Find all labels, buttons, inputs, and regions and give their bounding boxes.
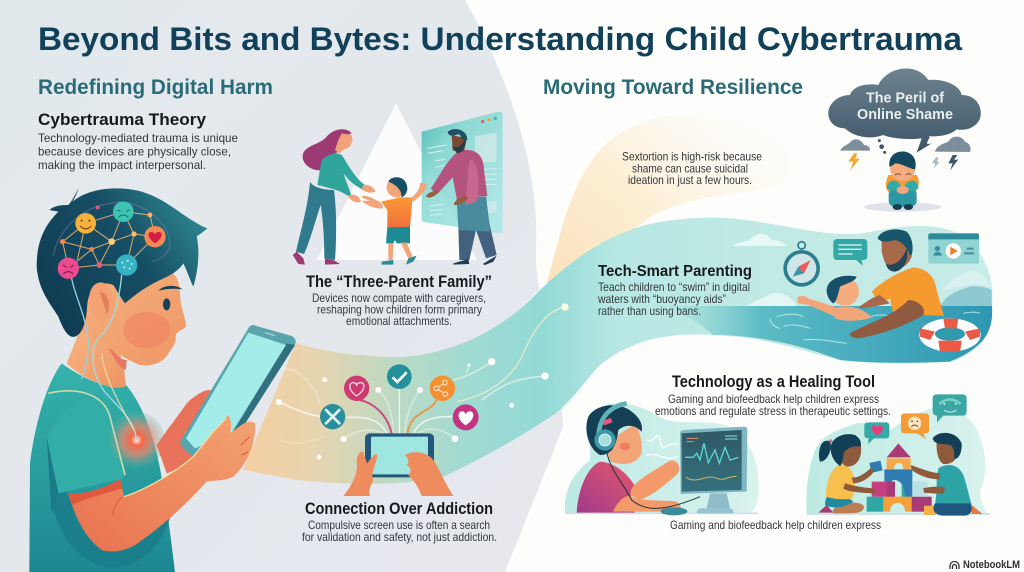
emotion faces (75, 213, 96, 234)
text block: Cybertrauma Theory (38, 110, 238, 172)
panel: peril of online shame (828, 68, 981, 212)
text block: Tech-Smart Parenting (597, 263, 752, 318)
panel: left gray region (0, 0, 563, 572)
threads (48, 275, 137, 475)
icon: heart outline (344, 376, 369, 401)
icon: video card (928, 233, 979, 264)
text block: sextortion: ideation in just a few hours. (628, 173, 752, 187)
blocks (867, 497, 883, 512)
text block: The Three-Parent Family: Devices now compate with caregivers, (312, 291, 486, 305)
text block: The Three-Parent Family: reshaping how children form primary (317, 302, 482, 316)
text block: Technology as a Healing Tool (655, 373, 891, 418)
white swoosh (487, 285, 548, 335)
phone (180, 325, 296, 456)
hands (343, 451, 377, 496)
life ring (919, 318, 981, 352)
icon: tools (320, 404, 345, 429)
caption: Gaming and biofeedback help children express (670, 518, 881, 532)
illustration: children with building blocks (806, 394, 990, 516)
heading: Redefining Digital Harm: Redefining Digital Harm (38, 76, 273, 99)
network (53, 202, 170, 268)
icon: chat bubble (833, 239, 867, 266)
arm (68, 415, 255, 552)
child (577, 462, 637, 513)
text block: Tech-Smart Parenting: Tech-Smart Parenting (598, 263, 752, 280)
text block: Technology as a Healing Tool: Technology as a Healing Tool (672, 373, 875, 391)
teal flow band (243, 218, 993, 484)
text block: Connection Over Addiction: Compulsive screen use is often a search (308, 518, 490, 532)
illustration: connection network and tablet (276, 303, 569, 496)
text block: Tech-Smart Parenting: waters with “buoyancy aids” (597, 292, 726, 306)
text block: The Three-Parent Family (306, 273, 492, 328)
icon: compass (783, 242, 820, 287)
girl (818, 505, 833, 513)
text block: Connection Over Addiction (302, 499, 497, 544)
device screen (422, 112, 503, 233)
icon: storm cloud (828, 68, 981, 171)
icon: share (430, 376, 455, 401)
illustration: child with tablet and emotional network (29, 188, 296, 572)
text block: Cybertrauma Theory: Technology-mediated trauma is unique (38, 131, 238, 145)
tablet (365, 433, 434, 477)
heading: Moving Toward Resilience: Moving Toward Resilience (543, 76, 803, 99)
child swimmer (835, 306, 872, 321)
monitor (680, 427, 747, 494)
boy (935, 465, 972, 505)
hills and clouds (940, 286, 992, 307)
woman (303, 129, 352, 170)
illustration: child with biofeedback monitor (565, 403, 759, 515)
cloud label: Online Shame (857, 107, 953, 123)
speech bubbles (864, 422, 889, 444)
illustration: three-parent family (293, 103, 503, 265)
text block: The Three-Parent Family: The “Three-Parent Family” (306, 273, 492, 291)
title: Beyond Bits and Bytes: Understanding Child Cybertrauma (38, 21, 962, 57)
text block: Cybertrauma Theory: Cybertrauma Theory (38, 110, 207, 129)
cloud label (857, 90, 953, 123)
water (660, 306, 992, 363)
text block: Cybertrauma Theory: making the impact interpersonal. (38, 158, 206, 172)
text block: sextortion: Sextortion is high-risk because (622, 150, 762, 164)
child crouching (864, 152, 941, 212)
father (882, 239, 912, 270)
text block: Cybertrauma Theory: because devices are physically close, (38, 144, 231, 158)
far hand (157, 390, 213, 473)
text block: Connection Over Addiction: Connection Over Addiction (305, 499, 493, 518)
text block: sextortion: shame can cause suicidal (632, 162, 748, 176)
illustration: tech-smart parenting swimming scene (660, 229, 992, 363)
icon: check (387, 364, 412, 389)
icon: heart solid (453, 404, 479, 430)
text block: The Three-Parent Family: emotional attachments. (346, 314, 452, 328)
text block: Technology as a Healing Tool: emotions and regulate stress in therapeutic settings. (655, 404, 891, 418)
text block: sextortion (622, 150, 762, 187)
text block: Connection Over Addiction: for validation and safety, not just addiction. (302, 530, 497, 544)
text block: Tech-Smart Parenting: rather than using bans. (598, 304, 701, 318)
text block: Tech-Smart Parenting: Teach children to “swim” in digital (598, 280, 750, 294)
child (386, 227, 410, 243)
orange flow plume (526, 115, 790, 340)
cloud label: The Peril of (866, 90, 944, 106)
text block: Technology as a Healing Tool: Gaming and biofeedback help children express (668, 392, 879, 406)
man (457, 197, 497, 260)
